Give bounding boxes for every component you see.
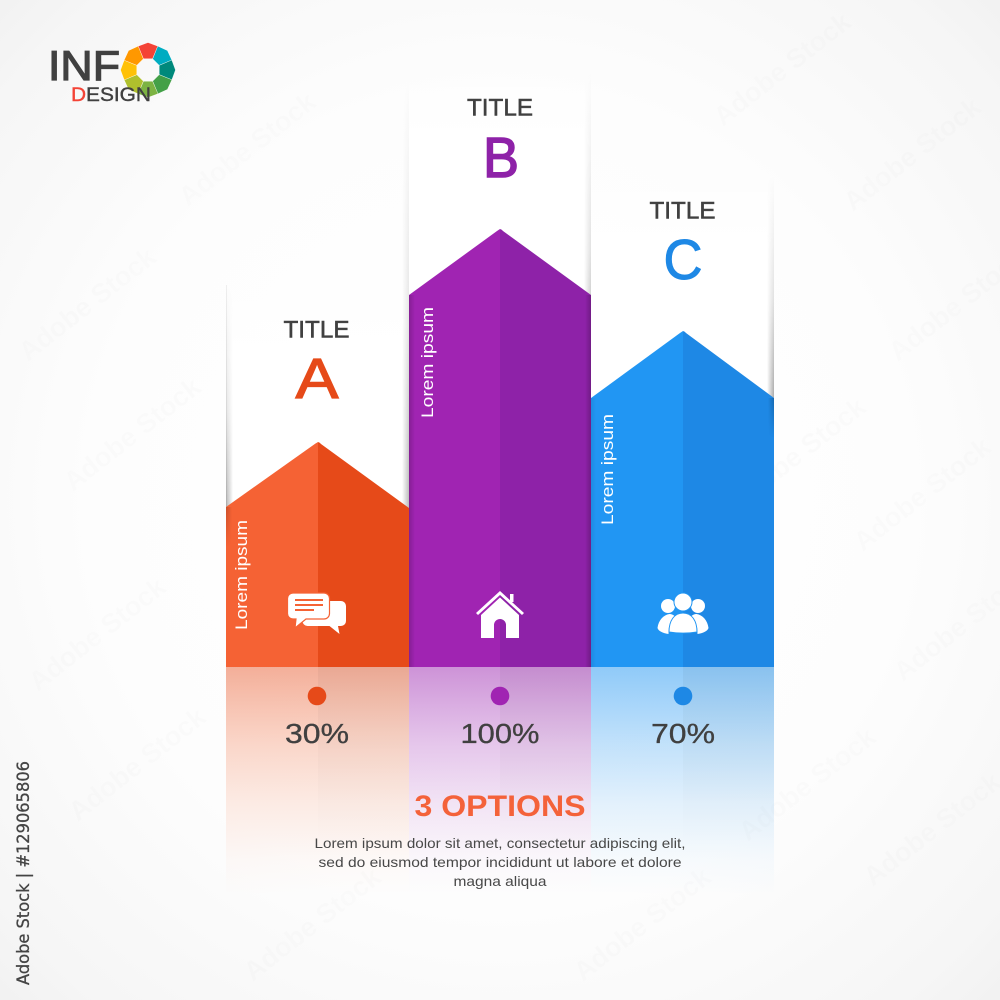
marker C xyxy=(674,687,692,705)
label A: Lorem ipsum xyxy=(232,520,251,630)
heading B xyxy=(467,94,533,190)
heading C: C xyxy=(664,228,702,292)
watermark pattern: Adobe Stock xyxy=(173,86,322,212)
value: 70%: 70% xyxy=(651,718,715,749)
arrow bar B xyxy=(409,229,591,667)
watermark pattern: Adobe Stock xyxy=(733,721,882,847)
logo xyxy=(48,42,176,106)
heading C xyxy=(650,198,716,292)
icon: speech bubbles xyxy=(288,593,346,634)
column backgrounds and fold shadows xyxy=(226,128,774,508)
body text xyxy=(314,835,686,889)
heading A: TITLE xyxy=(284,316,350,344)
watermark pattern: Adobe Stock xyxy=(13,241,162,367)
reflections xyxy=(226,667,774,895)
watermark pattern: Adobe Stock xyxy=(58,371,207,497)
stock id label: Adobe Stock | #129065806 xyxy=(14,761,34,985)
label C: Lorem ipsum xyxy=(598,414,617,525)
icon: people xyxy=(658,593,708,634)
watermark pattern: Adobe Stock xyxy=(838,91,987,217)
marker A xyxy=(308,687,326,705)
heading C: TITLE xyxy=(650,198,716,224)
heading A xyxy=(284,316,350,411)
reflection B xyxy=(409,667,591,895)
heading B: TITLE xyxy=(467,94,533,122)
reflection C xyxy=(591,667,774,895)
watermark pattern: Adobe Stock xyxy=(63,701,212,827)
watermark pattern: Adobe Stock xyxy=(23,571,172,697)
heading B: B xyxy=(483,126,519,190)
body text: Lorem ipsum dolor sit amet, consectetur adipiscing elit, xyxy=(314,835,686,851)
marker B xyxy=(491,687,509,705)
reflection A xyxy=(226,667,409,895)
icon: house xyxy=(476,591,524,638)
logo wordmark: DESIGN: DESIGN xyxy=(71,84,151,106)
label B: Lorem ipsum xyxy=(418,307,437,418)
heading: 3 options: 3 OPTIONS xyxy=(414,790,586,823)
body text: magna aliqua xyxy=(454,873,547,889)
heading A: A xyxy=(296,347,338,411)
logo wheel xyxy=(120,42,176,98)
arrow bar C xyxy=(591,331,774,667)
body text: sed do eiusmod tempor incididunt ut labore et dolore xyxy=(318,854,682,870)
watermark pattern: Adobe Stock xyxy=(568,861,717,987)
logo wordmark: INF: INF xyxy=(48,42,120,89)
watermark pattern: Adobe Stock xyxy=(238,861,387,987)
value: 30%: 30% xyxy=(285,718,349,749)
watermark pattern: Adobe Stock xyxy=(708,6,857,132)
watermark pattern: Adobe Stock xyxy=(723,391,872,517)
value: 100%: 100% xyxy=(460,718,540,749)
watermark pattern: Adobe Stock xyxy=(848,431,997,557)
arrow bar A xyxy=(226,442,409,667)
